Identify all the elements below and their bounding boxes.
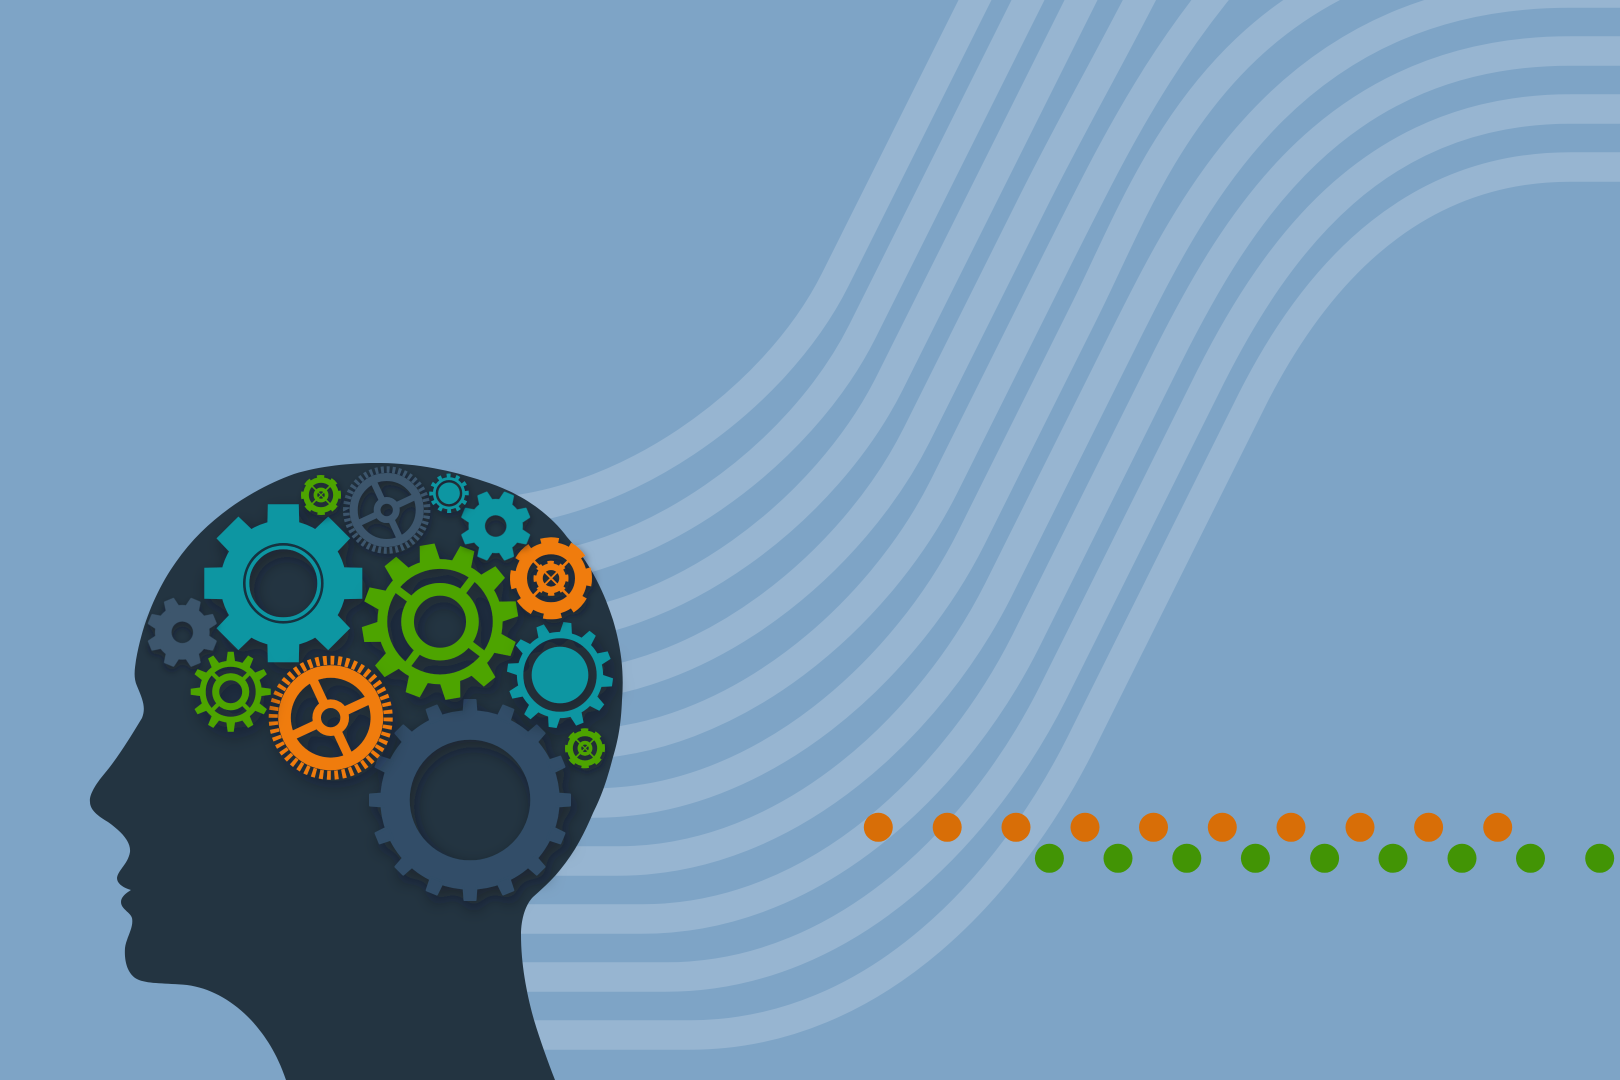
orange dots row [864, 813, 1512, 842]
flowing stripes [440, 0, 1620, 1035]
gear: large green [350, 532, 530, 712]
gear: tiny teal top [432, 476, 466, 511]
gear: small dark left [137, 587, 227, 677]
gear: large dark [370, 700, 570, 900]
head silhouette [90, 463, 623, 1080]
gears [137, 470, 620, 900]
gear: large teal [204, 504, 362, 662]
gear: orange upper right [512, 540, 590, 617]
gear: orange fine-toothed [273, 660, 388, 775]
green dots row [1035, 844, 1614, 873]
gear: teal upper small with hole [451, 481, 541, 571]
gear: tiny green lower right [567, 730, 603, 767]
gear: teal right with solid disc [500, 615, 620, 735]
gear: dark fine-toothed top [346, 470, 427, 550]
gear: tiny green top [303, 477, 339, 513]
gear: small green left [191, 652, 271, 732]
